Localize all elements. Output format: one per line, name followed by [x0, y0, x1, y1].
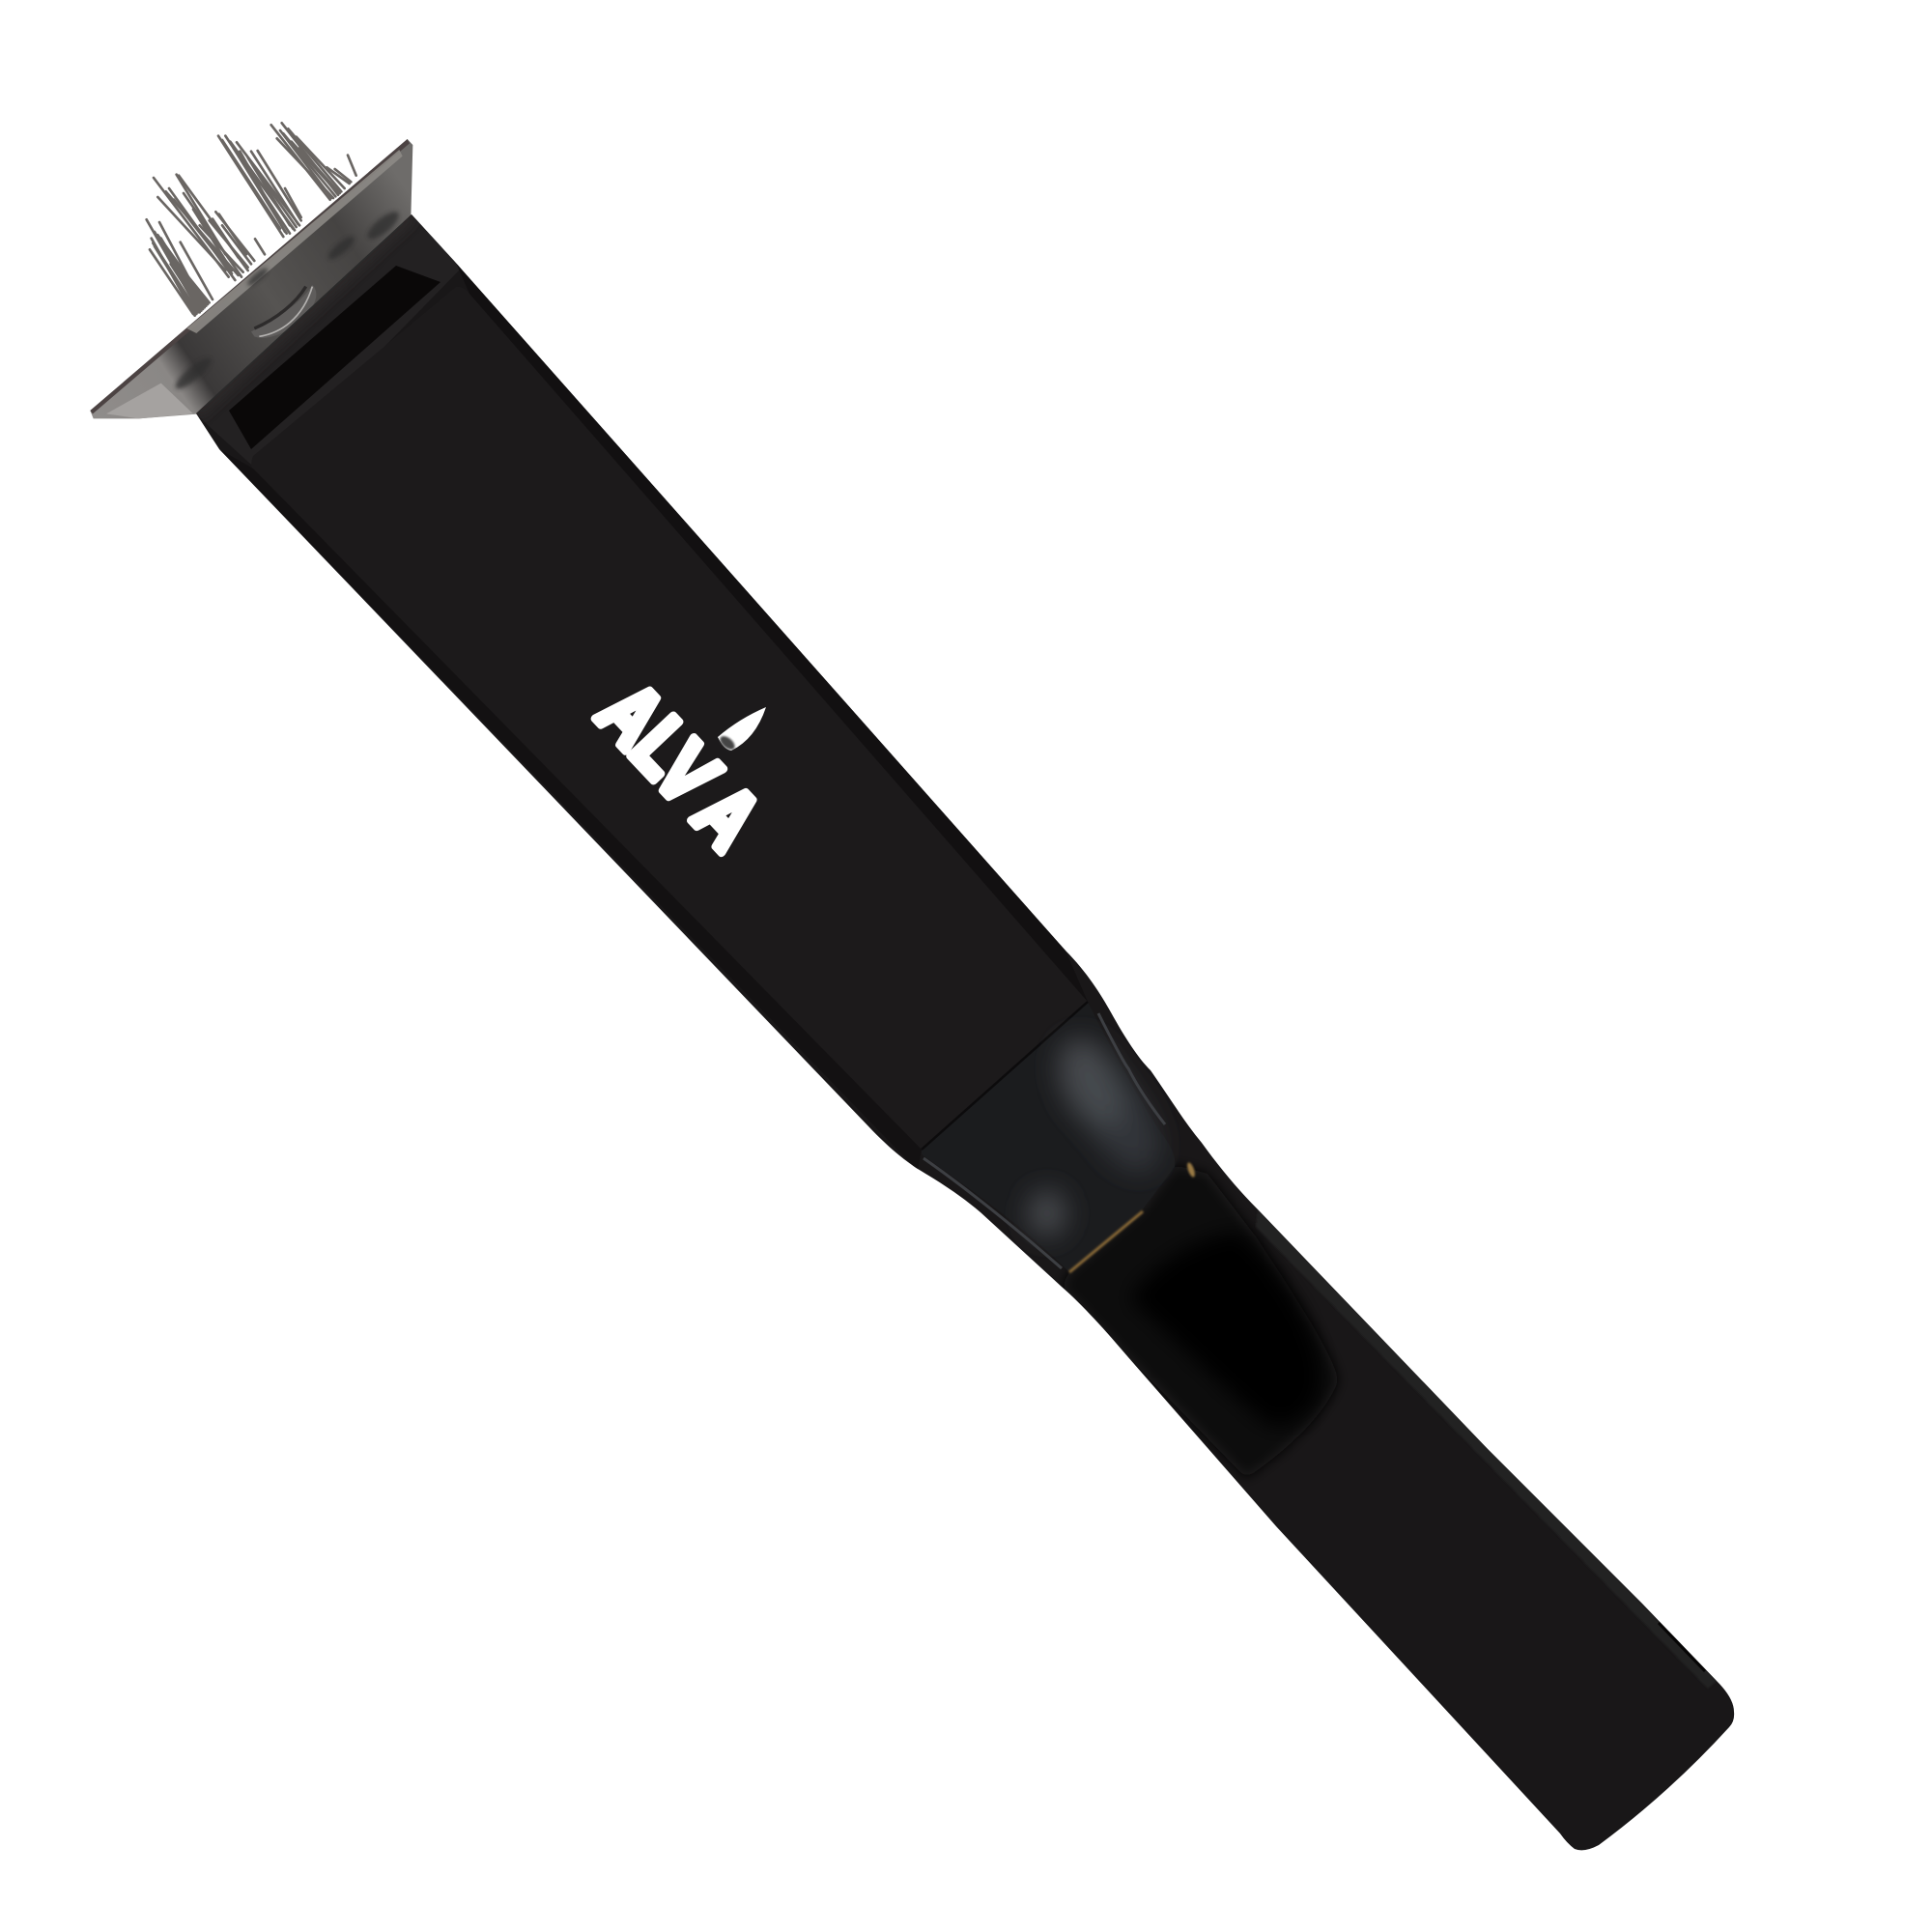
- panel edge lower: [219, 449, 922, 1171]
- logo wordmark: ALVA: [581, 664, 780, 867]
- logo flame: [718, 707, 766, 751]
- plate light stripe: [186, 150, 403, 333]
- connector ferrule: [196, 214, 464, 473]
- dark grip blob: [1141, 1238, 1318, 1421]
- gold reflection line: [1069, 1211, 1143, 1272]
- ferrule blend with plate: [196, 214, 412, 413]
- plate blotches: [172, 208, 403, 393]
- slot near end: [1659, 1623, 1705, 1671]
- glossy neck section: [1065, 1161, 1175, 1271]
- main matte panel: [251, 287, 1088, 1150]
- neck boundary line: [922, 1002, 1088, 1150]
- panel edge upper: [456, 264, 1066, 951]
- gold reflection spot: [1185, 1161, 1197, 1179]
- plate top edge: [90, 139, 410, 413]
- wire bristles: [147, 123, 356, 316]
- gloss lower neck: [1062, 1165, 1338, 1478]
- ferrule slot: [229, 266, 440, 449]
- handle silhouette: [196, 214, 1734, 1850]
- bristle tuft 2: [154, 175, 265, 280]
- logo: ALVA: [581, 664, 780, 867]
- bristle tuft 3: [218, 136, 301, 237]
- bristle tuft 4: [271, 123, 356, 200]
- logo flame smudge: [718, 733, 737, 753]
- metal plate: [90, 139, 412, 418]
- plate rivet: [251, 285, 316, 338]
- neck rim lines: [923, 1013, 1165, 1268]
- illustration: ALVA wire brush: [90, 122, 1735, 1851]
- neck highlights: [1028, 1028, 1177, 1236]
- plate body: [90, 139, 412, 418]
- handle sheen: [1256, 1209, 1717, 1689]
- bristle tuft 1: [147, 219, 213, 316]
- plate corner highlight: [106, 384, 193, 418]
